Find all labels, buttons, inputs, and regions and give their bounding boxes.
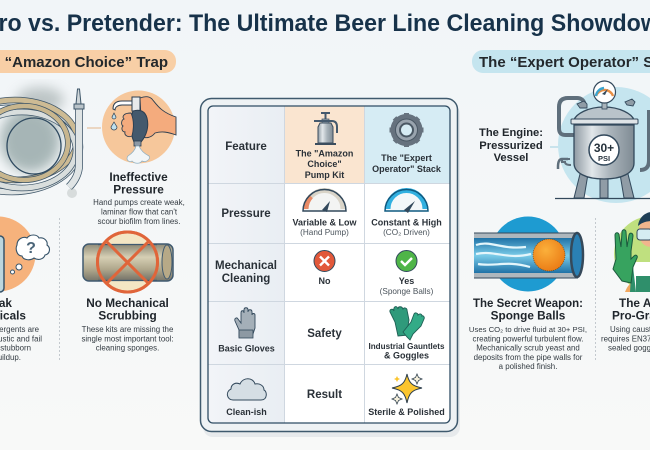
text: ineffective pressure: laminar flow that can't xyxy=(101,208,178,216)
text: variable and low xyxy=(292,218,358,237)
text: the engine: The Engine: xyxy=(479,127,543,139)
text: industrial gauntlets xyxy=(368,342,445,360)
icon: gear xyxy=(390,113,424,147)
text: no mechanical scrubbing: single most important tool: xyxy=(81,334,174,344)
icon: pressurized vessel xyxy=(555,81,650,203)
icon: worker in protective gear xyxy=(613,212,650,292)
icon: dirty coiled hose xyxy=(0,87,84,198)
text: sterile and polished: Sterile & Polished xyxy=(368,407,445,417)
text: the engine xyxy=(479,127,543,164)
row label: safety: Safety xyxy=(307,328,342,340)
icon: sponge ball in pipe xyxy=(474,216,583,292)
row label: result: Result xyxy=(307,389,342,401)
icon: basic glove xyxy=(235,308,255,338)
icon: green gauntlets xyxy=(390,307,424,340)
text: constant and high: Constant & High xyxy=(371,218,442,228)
text: constant and high xyxy=(371,218,442,237)
text: ineffective pressure: Hand pumps create weak, xyxy=(93,198,185,207)
text: yes: Yes xyxy=(399,276,414,286)
text: no: No xyxy=(318,276,331,286)
text: no mechanical scrubbing: cleaning sponges. xyxy=(96,344,159,352)
text: the secret weapon: a polished finish. xyxy=(499,362,557,371)
connector line xyxy=(87,127,101,129)
text: ineffective pressure xyxy=(93,170,185,226)
icon: pump sprayer xyxy=(314,113,337,145)
text: the engine: Pressurized xyxy=(479,140,543,152)
text: ineffective pressure: Ineffective xyxy=(109,170,168,184)
text: basic gloves: Basic Gloves xyxy=(218,344,275,354)
icon: weak chemicals xyxy=(0,216,49,292)
connector line xyxy=(550,146,559,148)
icon: weak chemicals: ? xyxy=(26,240,36,257)
text: no mechanical scrubbing xyxy=(81,296,174,352)
text: ineffective pressure: scour biofilm from lines. xyxy=(98,217,180,226)
text: the secret weapon: creating powerful turbulent flow. xyxy=(473,334,583,344)
text: variable and low: Variable & Low xyxy=(292,218,358,228)
text: no mechanical scrubbing: Scrubbing xyxy=(98,308,157,322)
column header: expert stack: The "Expert xyxy=(381,153,432,163)
icon: crossed-out pipe xyxy=(83,232,173,292)
panel: comparison table xyxy=(200,98,460,437)
icon: pressurized vessel: 30+ xyxy=(594,141,614,155)
column header: pump kit: The "Amazon xyxy=(296,148,353,158)
text: the secret weapon xyxy=(469,296,587,371)
text: clean-ish: Clean-ish xyxy=(226,407,267,417)
column header: pump kit xyxy=(296,148,353,180)
icon: high pressure gauge xyxy=(385,190,428,213)
icon: pressurized vessel: PSI xyxy=(598,154,610,163)
text: the secret weapon: The Secret Weapon: xyxy=(473,296,583,310)
column header: expert stack xyxy=(372,153,442,174)
divider xyxy=(58,218,60,361)
text: industrial gauntlets: & Goggles xyxy=(384,350,429,360)
text: yes xyxy=(380,276,434,296)
text: weak chemicals xyxy=(0,296,42,362)
text: no mechanical scrubbing: No Mechanical xyxy=(86,296,169,310)
text: the armor xyxy=(601,296,650,352)
text: the secret weapon: Uses CO₂ to drive fluid at 30+ PSI, xyxy=(469,325,587,334)
column header: expert stack: Operator" Stack xyxy=(372,164,442,174)
icon: red cross xyxy=(314,250,335,272)
icon: green check xyxy=(396,250,417,272)
text: the secret weapon: Mechanically scrub yeast and xyxy=(476,344,580,352)
text: the secret weapon: Sponge Balls xyxy=(491,308,566,322)
icon: hand pump xyxy=(102,90,176,164)
icon: sparkles xyxy=(392,374,422,404)
column header: pump kit: Pump Kit xyxy=(305,170,344,180)
text: variable and low: (Hand Pump) xyxy=(300,228,349,237)
row label: mechanical cleaning xyxy=(215,260,277,285)
icon: cloud xyxy=(227,379,266,400)
row label: mechanical cleaning: Cleaning xyxy=(222,273,270,285)
text: constant and high: (CO₂ Driven) xyxy=(383,228,430,237)
column header: pump kit: Choice" xyxy=(307,159,342,169)
text: the secret weapon: deposits from the pipe walls for xyxy=(474,353,583,362)
row label: pressure: Pressure xyxy=(221,208,271,220)
text: no mechanical scrubbing: These kits are missing the xyxy=(82,325,174,334)
row label: mechanical cleaning: Mechanical xyxy=(215,260,277,272)
text: industrial gauntlets: Industrial Gauntlets xyxy=(368,342,445,351)
divider xyxy=(594,218,596,361)
row label: feature: Feature xyxy=(225,141,267,153)
icon: low pressure gauge xyxy=(303,190,346,212)
text: the engine: Vessel xyxy=(494,152,528,164)
text: yes: (Sponge Balls) xyxy=(380,287,434,296)
text: ineffective pressure: Pressure xyxy=(113,182,164,196)
